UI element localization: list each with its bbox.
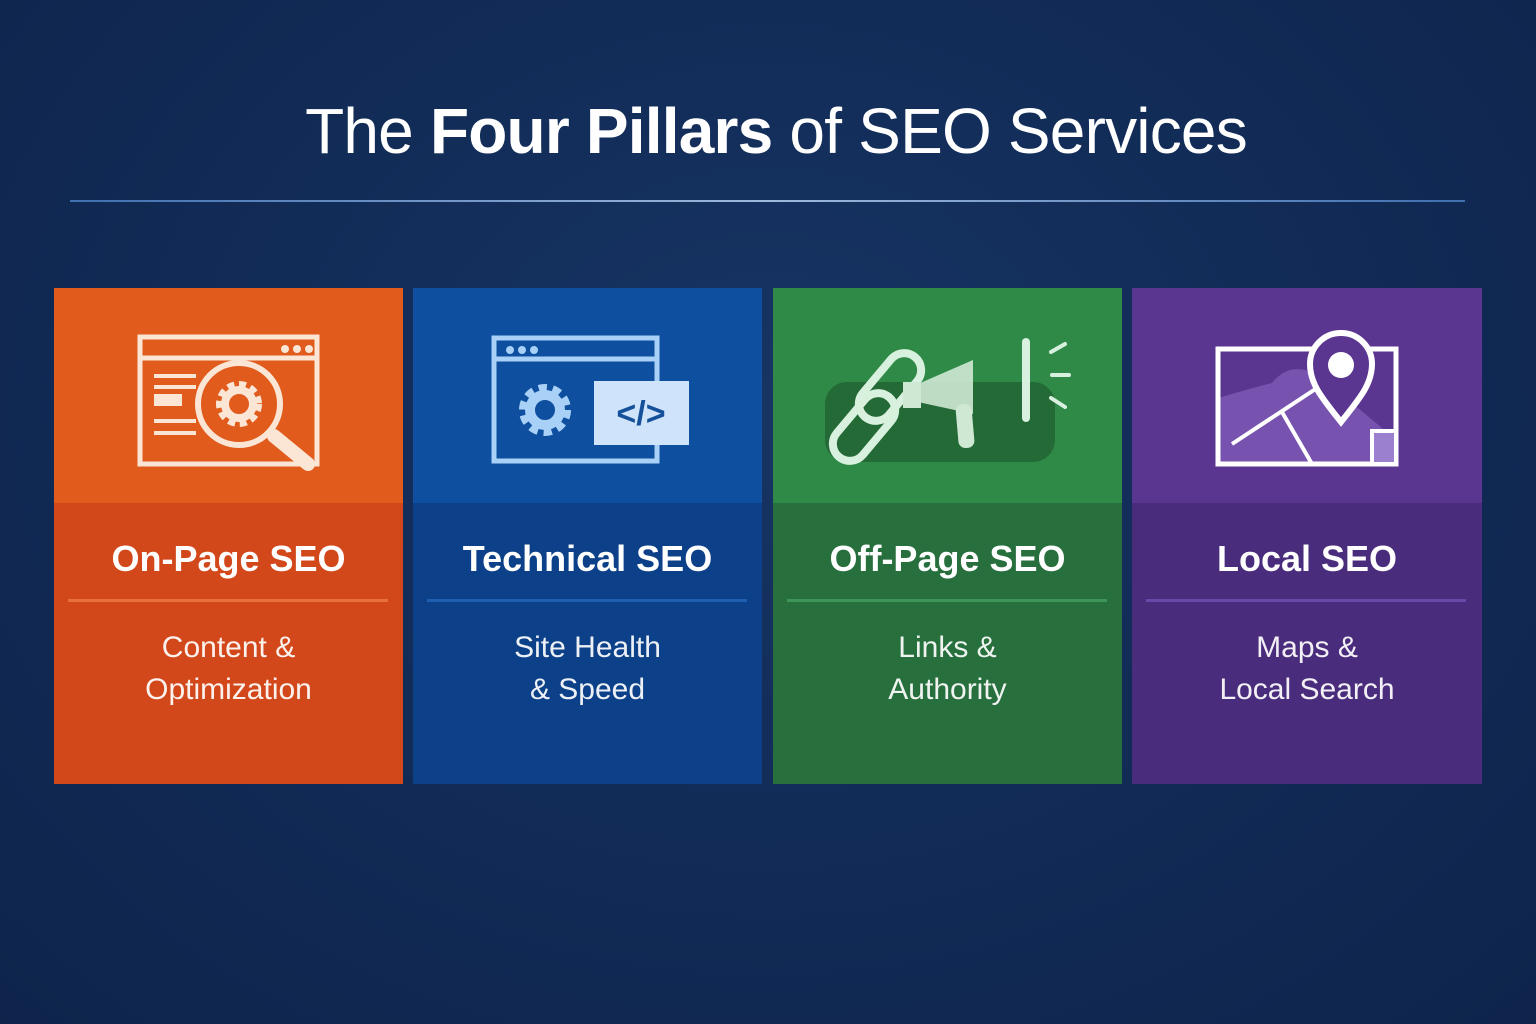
description: Local Search (1219, 673, 1395, 706)
description: Content & (162, 631, 295, 664)
description (888, 631, 1007, 706)
icon: browser with gear and code (492, 336, 689, 464)
description: Site Health (514, 631, 661, 664)
panel: off-page SEO (773, 288, 1122, 784)
description: Maps & (1256, 631, 1358, 664)
description: Authority (888, 673, 1007, 706)
panel: on-page SEO (54, 288, 403, 784)
title: The Four Pillars of SEO Services (305, 95, 1247, 167)
description (514, 631, 661, 706)
panel: local SEO (1132, 288, 1482, 784)
icon: chain link and megaphone (825, 338, 1071, 465)
icon: browser with magnifier gear (138, 334, 320, 471)
heading: Off-Page SEO (829, 538, 1066, 579)
description: & Speed (530, 673, 645, 706)
icon: map with pin (1216, 330, 1398, 466)
description (1219, 631, 1395, 706)
panel: technical SEO (413, 288, 762, 784)
description: Optimization (145, 673, 312, 706)
heading: On-Page SEO (111, 538, 346, 579)
description: Links & (898, 631, 997, 664)
heading: Technical SEO (463, 538, 712, 579)
description (145, 631, 312, 706)
icon: browser with gear and code: </> (616, 395, 666, 433)
heading: Local SEO (1217, 538, 1397, 579)
